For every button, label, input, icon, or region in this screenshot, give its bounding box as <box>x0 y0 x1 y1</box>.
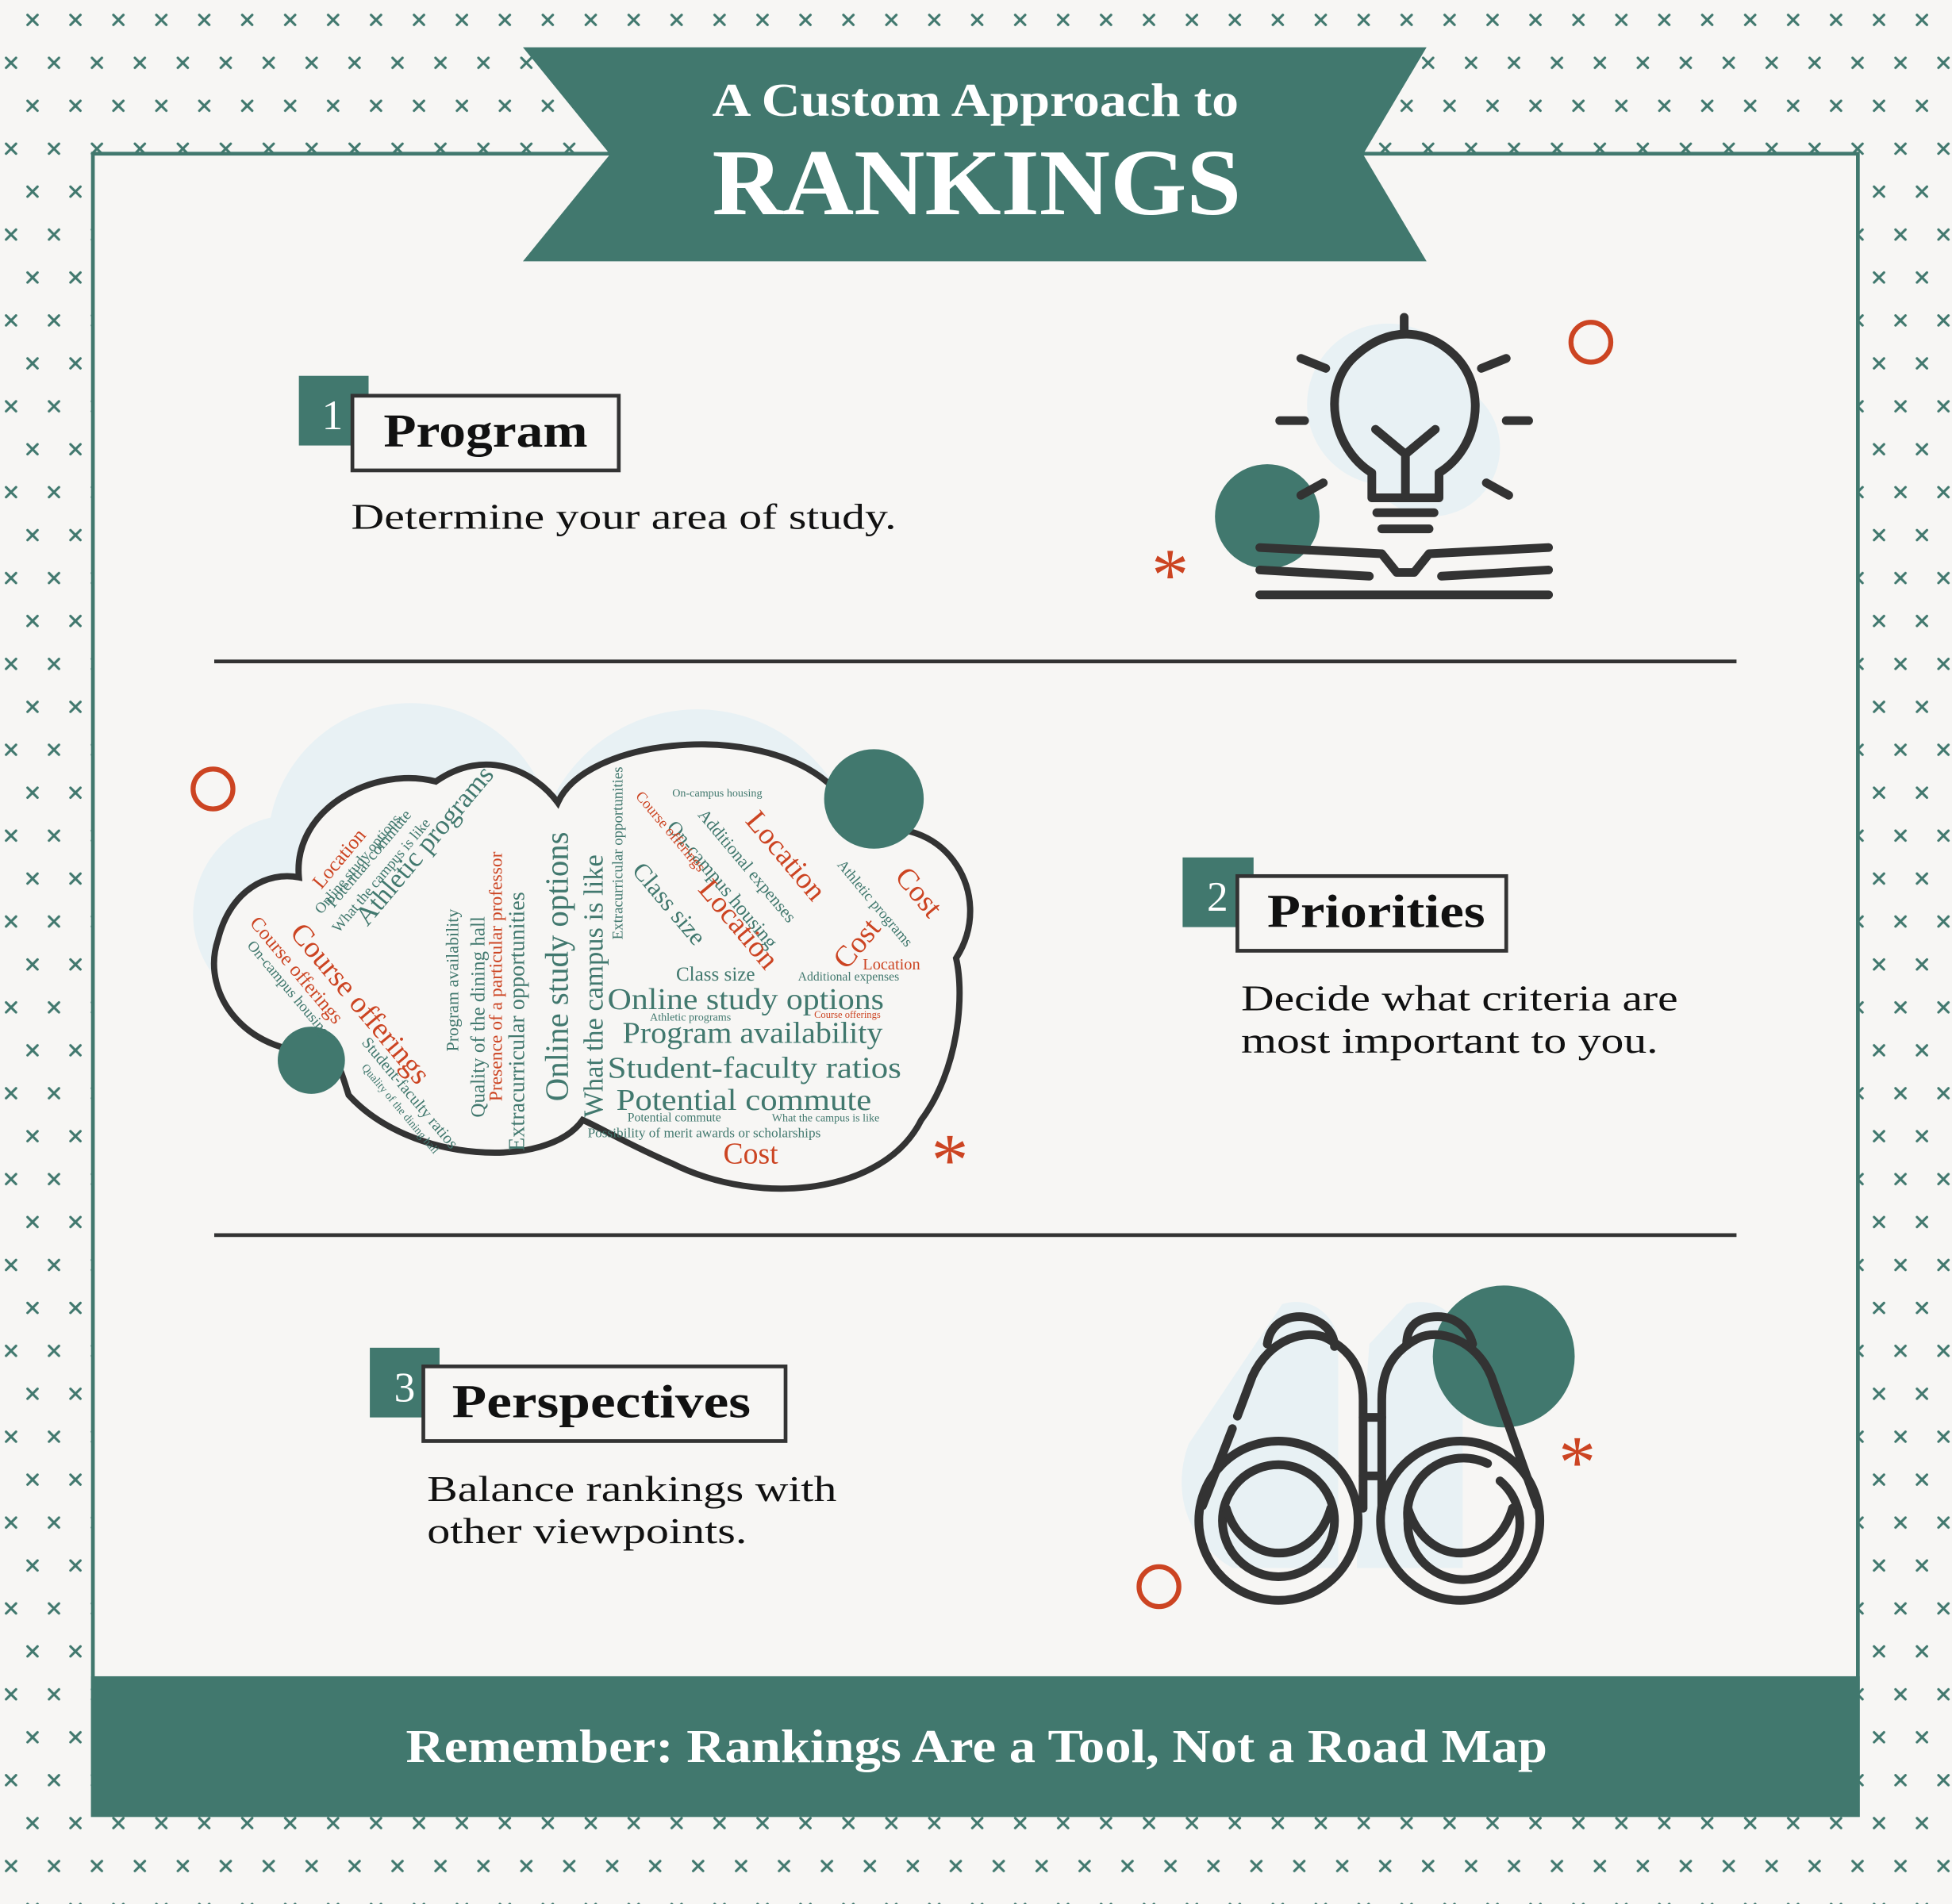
word cloud: Location <box>739 804 833 908</box>
section 2 text: most important to you. <box>1241 1020 1658 1061</box>
icon: binoculars: * <box>1558 1422 1596 1504</box>
icon: lightbulb and book: * <box>1151 534 1189 616</box>
divider <box>214 1234 1736 1237</box>
section 3 text <box>427 1468 837 1551</box>
icon: binoculars <box>1139 1285 1596 1606</box>
word cloud: Athletic programs <box>349 760 500 931</box>
word cloud: What the campus is like <box>772 1111 879 1124</box>
section 3 text: Balance rankings with <box>427 1468 837 1509</box>
section 3 heading: Perspectives <box>452 1376 751 1428</box>
word cloud: Program availability <box>442 909 462 1051</box>
word cloud: Course offerings <box>632 789 709 875</box>
section 3 heading: 3 <box>394 1363 415 1411</box>
word cloud: On-campus housing <box>244 938 333 1041</box>
word cloud: Cost <box>724 1138 778 1171</box>
section 2 text: Decide what criteria are <box>1241 978 1678 1019</box>
word cloud: Quality of the dining hall <box>359 1061 441 1157</box>
section 1 text: Determine your area of study. <box>352 497 897 537</box>
word cloud: Location <box>309 824 371 892</box>
word cloud: Possibility of merit awards or scholarships <box>588 1126 821 1141</box>
word cloud: Athletic programs <box>650 1011 731 1023</box>
word cloud: Online study options <box>312 812 405 917</box>
word cloud: Cost <box>827 912 887 975</box>
word cloud: Class size <box>676 964 755 985</box>
word cloud: * <box>932 1119 969 1201</box>
word cloud: Student-faculty ratios <box>608 1051 901 1084</box>
word cloud: Course offerings <box>814 1009 881 1020</box>
section 3 text: other viewpoints. <box>427 1511 747 1551</box>
word cloud: Presence of a particular professor <box>486 851 506 1101</box>
word cloud: Online study options <box>539 832 574 1101</box>
word cloud: Course offerings <box>245 912 348 1028</box>
section 1 heading: Program <box>383 405 588 457</box>
word cloud: Extracurricular opportunities <box>505 892 530 1151</box>
word cloud: Student-faculty ratios <box>358 1035 461 1153</box>
section 2 heading: Priorities <box>1267 885 1485 938</box>
section 2 heading <box>1182 858 1506 950</box>
section 2 text <box>1241 978 1678 1061</box>
section 2 heading: 2 <box>1207 873 1228 920</box>
word cloud: Extracurricular opportunities <box>610 766 627 939</box>
title banner: RANKINGS <box>712 130 1241 235</box>
section 1 heading <box>299 376 619 470</box>
word cloud: Course offerings <box>283 916 437 1091</box>
word cloud: Program availability <box>623 1017 883 1050</box>
word cloud: Potential commute <box>324 807 415 911</box>
divider <box>214 659 1736 663</box>
word cloud: On-campus housing <box>663 817 782 954</box>
title banner: A Custom Approach to <box>712 74 1239 126</box>
word cloud: Additional expenses <box>798 970 899 984</box>
word cloud: Additional expenses <box>694 805 801 927</box>
title banner <box>523 48 1427 261</box>
word cloud: Potential commute <box>617 1084 871 1117</box>
word cloud: Quality of the dining hall <box>467 916 489 1118</box>
word cloud: Athletic programs <box>833 857 916 950</box>
word cloud: What the campus is like <box>578 854 609 1118</box>
word cloud: Potential commute <box>628 1111 721 1124</box>
word cloud: What the campus is like <box>329 816 434 936</box>
word cloud <box>193 703 970 1201</box>
section 1 heading: 1 <box>322 391 343 439</box>
word cloud: Cost <box>889 861 949 924</box>
footer banner: Remember: Rankings Are a Tool, Not a Road Map <box>406 1720 1547 1772</box>
section 3 heading <box>370 1348 786 1441</box>
footer banner <box>91 1676 1860 1817</box>
word cloud: Class size <box>627 857 712 950</box>
icon: lightbulb and book <box>1151 317 1611 616</box>
word cloud: Online study options <box>608 983 884 1016</box>
frame <box>93 154 1858 1815</box>
word cloud: On-campus housing <box>672 787 763 800</box>
word cloud: Location <box>863 956 920 973</box>
word cloud: Location <box>692 873 786 976</box>
